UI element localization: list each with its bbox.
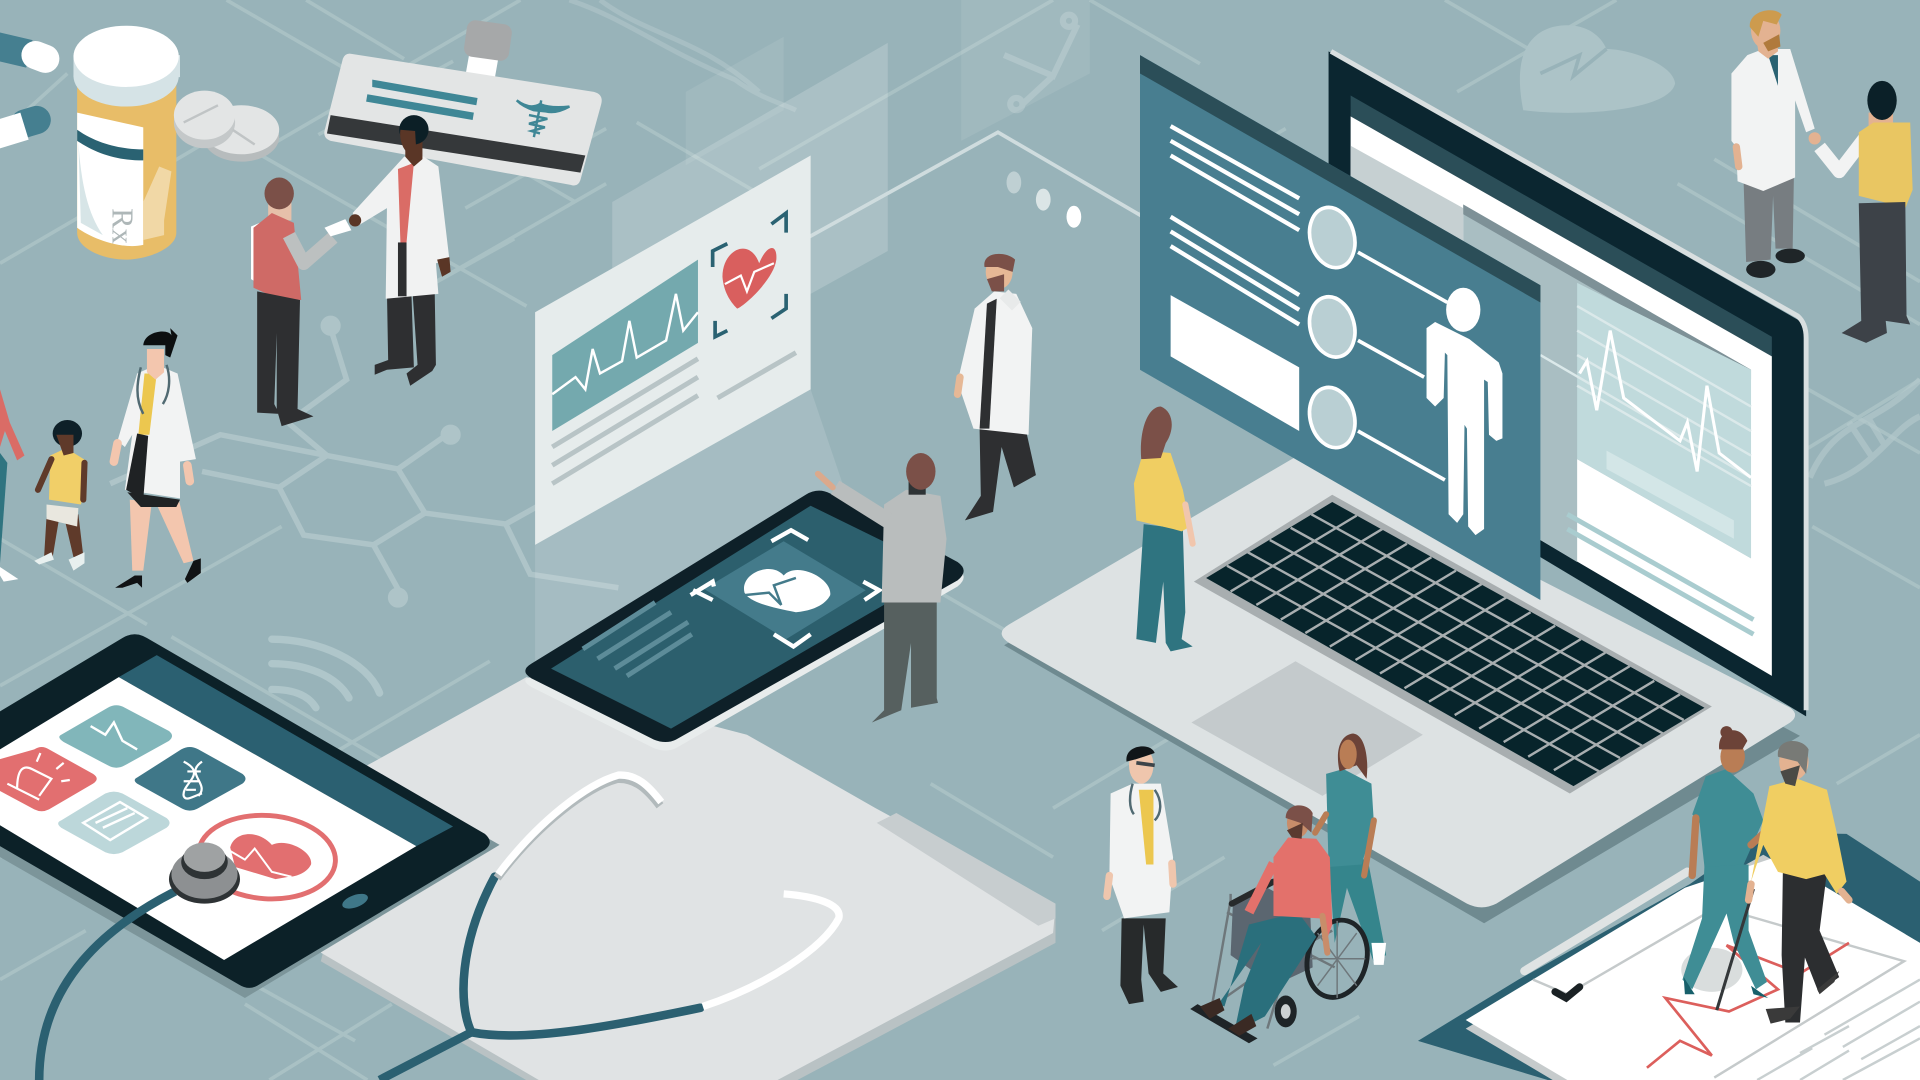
background DNA right [1810,380,1920,484]
background DNA top [569,0,796,110]
background heart [1520,25,1675,113]
man at phone [818,453,947,722]
people: woman at left edge [0,389,24,582]
nurse and man with cane [1681,726,1849,1024]
doctor with stethoscope [1107,746,1178,1004]
background molecule top [1004,15,1078,110]
floating health panel [535,156,811,545]
doctor and man shaking hands [1731,10,1913,343]
pill bottle: Rx [106,208,140,244]
wheelchair scene [1190,733,1386,1043]
phone [525,491,964,751]
people: child [34,420,86,571]
clipboard [1418,833,1920,1080]
doctor walking [958,254,1036,520]
ID badge [324,19,602,186]
outline window with dots [784,132,1145,251]
tile: alarm [0,747,97,811]
people: patient in red vest and doctor [251,115,451,426]
folder [321,677,1056,1080]
teal medical panel [1140,55,1540,600]
pill bottle [73,26,180,260]
stethoscope [39,775,839,1080]
human figure [1427,288,1502,535]
laptop [1002,51,1806,923]
translucent rear panel [535,0,1090,686]
pills [174,91,279,162]
tablet [0,634,500,998]
wifi icon [272,639,380,708]
people: woman doctor [114,328,201,588]
tile: DNA [135,747,246,811]
tile: document [58,792,170,854]
background molecule [110,318,618,605]
woman in yellow [1134,407,1193,651]
capsules [0,45,45,136]
tile: heartbeat [59,705,172,768]
